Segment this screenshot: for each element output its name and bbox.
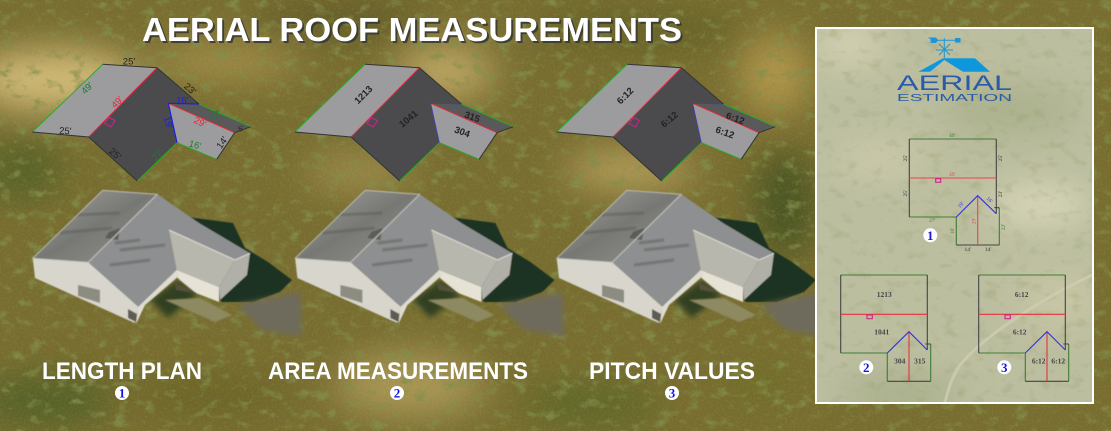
plan 3: pitches: 6:12 — [1051, 356, 1065, 365]
roof diagram 1: lengths: 27' — [150, 147, 166, 164]
roof diagram 2: areas: 315 — [463, 110, 482, 126]
roof diagram 1: lengths — [32, 56, 251, 181]
plan 1: lengths: 19' — [957, 201, 966, 210]
label: area measurements — [268, 358, 528, 400]
roof diagram 3: pitches: 6:12 — [615, 86, 636, 107]
label: pitch values: PITCH VALUES — [589, 358, 755, 385]
plan 1: lengths: 49' — [949, 133, 956, 139]
plan 1: lengths: 29' — [972, 218, 978, 224]
roof diagram 1: lengths: 25' — [123, 56, 135, 68]
plan 1: lengths: 25' — [903, 190, 909, 197]
plan 1: lengths: 16' — [950, 228, 956, 234]
title: AERIAL ROOF MEASUREMENTS — [142, 11, 682, 48]
house photo 2 — [295, 190, 564, 336]
plan 3: pitches: 6:12 — [1013, 327, 1027, 336]
number badge 2: 2 — [863, 360, 870, 375]
panel: plan view summary — [815, 27, 1100, 409]
plan 1: lengths: 49' — [949, 172, 956, 178]
plan 1: lengths: 25' — [998, 155, 1004, 161]
plan 2: areas: 1041 — [874, 327, 889, 336]
plan 2: areas — [841, 275, 931, 381]
plan 1: lengths — [903, 133, 1007, 253]
icon: roof with weather vane — [918, 38, 990, 72]
roof diagram 1: lengths: 19' — [161, 115, 175, 130]
plan 2: areas: 1213 — [877, 290, 892, 299]
label: pitch values — [589, 358, 755, 400]
label: length plan: LENGTH PLAN — [42, 358, 202, 385]
label: area measurements: AREA MEASUREMENTS — [268, 358, 528, 385]
roof diagram 3: pitches: 6:12 — [659, 110, 681, 130]
roof diagram 1: lengths: 49' — [109, 94, 126, 111]
label: length plan — [42, 358, 202, 400]
plan 1: lengths: 23' — [998, 191, 1004, 197]
roof diagram 1: lengths: 5' — [238, 125, 245, 134]
plan 2: areas: 315 — [914, 356, 926, 365]
roof diagram 2: areas: 1041 — [397, 108, 421, 130]
plan 1: lengths: 27' — [929, 218, 936, 224]
plan 3: pitches: 6:12 — [1032, 356, 1046, 365]
label: pitch values: 3 — [669, 386, 676, 400]
roof diagram 3: pitches — [557, 64, 775, 181]
roof diagram 2: areas — [295, 64, 513, 181]
roof diagram 1: lengths: 16' — [176, 95, 189, 106]
plan 1: lengths: 16' — [985, 196, 993, 205]
label: length plan: 1 — [119, 386, 125, 400]
logo: aerial estimation: ESTIMATION — [897, 93, 1012, 104]
house photo 3 — [557, 190, 826, 336]
roof diagram 1: lengths: 23' — [181, 81, 198, 98]
logo: aerial estimation — [897, 38, 1012, 104]
plan 1: lengths: 25' — [903, 155, 909, 161]
roof diagram 2: areas: 1213 — [353, 84, 375, 107]
roof diagram 1: lengths: 49' — [79, 80, 96, 97]
roof diagram 1: lengths: 22' — [207, 108, 223, 123]
roof diagram 3: pitches: 6:12 — [724, 111, 746, 127]
plan 1: lengths: 22' — [1001, 224, 1007, 230]
roof diagram 3: pitches: 6:12 — [714, 125, 736, 141]
number badge 3: 3 — [1001, 360, 1008, 375]
roof diagram 1: lengths: 16' — [187, 139, 202, 152]
plan 3: pitches: 6:12 — [1015, 290, 1029, 299]
plan 2: areas: 304 — [894, 356, 906, 365]
plan 1: lengths: 14' — [985, 247, 992, 253]
plan 1: lengths: 14' — [964, 247, 971, 253]
roof diagram 1: lengths: 25' — [59, 126, 72, 137]
roof diagram 1: lengths: 25' — [106, 146, 123, 163]
roof diagram 1: lengths: 14' — [215, 135, 231, 151]
house photo 1 — [33, 190, 302, 336]
plan 3: pitches — [979, 275, 1069, 381]
title: AERIAL ROOF MEASUREMENTS — [144, 13, 684, 50]
logo: aerial estimation: AERIAL — [897, 72, 1012, 95]
number badge 1: 1 — [927, 228, 934, 243]
roof diagram 1: lengths: 29' — [192, 115, 208, 130]
roof diagram 2: areas: 304 — [453, 125, 472, 141]
label: area measurements: 2 — [394, 386, 400, 400]
